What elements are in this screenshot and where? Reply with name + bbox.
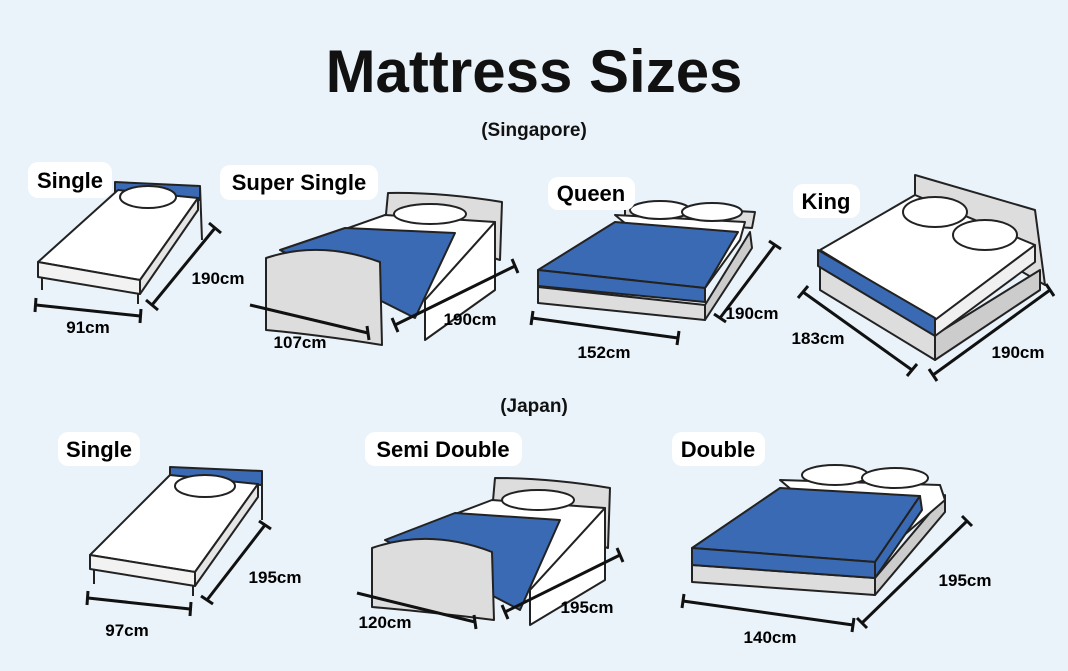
- label: Double: [672, 432, 765, 466]
- dimension: 91cm: [35, 298, 141, 323]
- text: 190cm: [726, 304, 778, 323]
- label: King: King: [802, 189, 850, 214]
- bed: SG single: [38, 182, 202, 304]
- bed: Semi Double: [372, 478, 610, 625]
- dimension: 120cm: [357, 593, 476, 629]
- subtitle: Japan: (Japan): [500, 396, 568, 417]
- dimension: 195cm: [857, 516, 972, 628]
- label: Super Single: Super Single: [232, 170, 366, 195]
- label: Super Single: [220, 165, 378, 200]
- text: 120cm: [359, 613, 411, 632]
- label: Semi Double: [365, 432, 522, 466]
- label: Single: [28, 162, 112, 198]
- label: King: [793, 184, 860, 218]
- dimension: 140cm: [682, 594, 854, 632]
- text: 97cm: [105, 621, 149, 640]
- text: 140cm: [744, 628, 796, 647]
- subtitle: Singapore: (Singapore): [481, 120, 587, 141]
- bed: Super Single: [266, 193, 502, 345]
- label: JP Single: Single: [66, 437, 132, 462]
- text: 195cm: [249, 568, 301, 587]
- dimension: 97cm: [87, 591, 191, 616]
- label: JP Single: [58, 432, 140, 466]
- dimension: 152cm: [531, 311, 679, 345]
- label: Double: Double: [681, 437, 755, 462]
- bed: Double: [692, 465, 945, 595]
- text: 91cm: [66, 318, 110, 337]
- text: 183cm: [792, 329, 844, 348]
- text: 107cm: [274, 333, 326, 352]
- dimension: 195cm: [502, 548, 623, 619]
- text: 195cm: [939, 571, 991, 590]
- text: 195cm: [561, 598, 613, 617]
- bed: Queen: [538, 201, 755, 320]
- text: 190cm: [992, 343, 1044, 362]
- dimension: 190cm: [392, 259, 518, 332]
- text: 190cm: [444, 310, 496, 329]
- dimension: 190cm: [146, 223, 221, 310]
- dimension: 195cm: [201, 521, 271, 604]
- label: Single: Single: [37, 168, 103, 193]
- bed: JP single: [90, 467, 262, 596]
- label: Queen: Queen: [557, 181, 625, 206]
- title: Mattress Sizes: [326, 38, 742, 105]
- dimension: 183cm: [798, 286, 917, 376]
- bed: King: [818, 175, 1045, 360]
- text: 152cm: [578, 343, 630, 362]
- dimension: 190cm: [929, 284, 1054, 381]
- dimension: 107cm: [250, 305, 369, 340]
- label: Semi Double: Semi Double: [376, 437, 510, 462]
- dimension: 190cm: [714, 241, 781, 322]
- text: 190cm: [192, 269, 244, 288]
- label: Queen: [548, 177, 635, 210]
